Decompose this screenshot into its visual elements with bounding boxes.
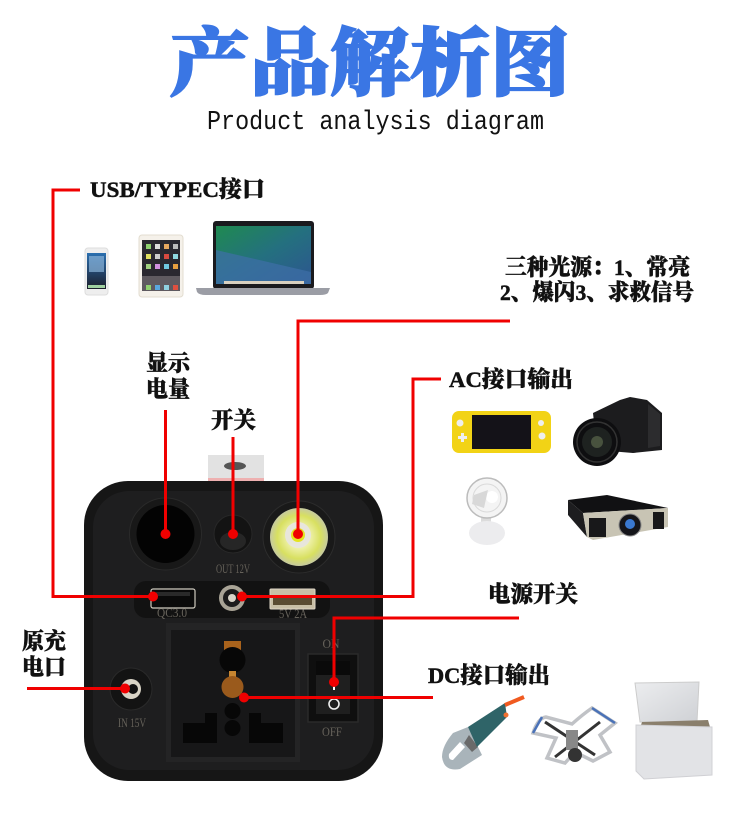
callout line: display <box>162 410 169 538</box>
USB 5V 2A port: 5V 2A <box>279 606 307 621</box>
label: AC output: AC接口输出 <box>449 366 573 392</box>
port strip <box>134 581 330 621</box>
label: OFF: OFF <box>322 724 342 739</box>
label: three light modes <box>500 254 694 305</box>
label: three light modes: 三种光源：1、常亮 <box>505 254 690 280</box>
label: ON: ON <box>322 636 340 651</box>
icon: phone <box>85 248 108 295</box>
switch button <box>214 515 252 553</box>
label: switch: 开关 <box>211 408 256 433</box>
USB QC3.0 port <box>151 589 195 620</box>
bracket <box>208 455 264 482</box>
icon: desk fan <box>467 478 507 545</box>
label: charge port: 电口 <box>22 655 66 680</box>
icon: projector <box>568 495 668 540</box>
label: display charge: 电量 <box>146 377 190 402</box>
USB 5V 2A port <box>270 589 315 621</box>
callout line: USB <box>53 190 156 600</box>
label: DC output: DC接口输出 <box>428 662 550 688</box>
icon: camera <box>573 397 662 466</box>
DC jack <box>219 585 245 611</box>
label: charge port <box>22 628 66 680</box>
label: display charge: 显示 <box>146 351 192 376</box>
callout line: AC <box>238 379 441 600</box>
icon: laptop <box>196 221 330 295</box>
icon: freezer <box>635 682 712 779</box>
device <box>84 455 383 781</box>
icon: vacuum <box>442 697 524 770</box>
device body <box>84 481 383 781</box>
AC socket <box>166 623 300 762</box>
callout line: power switch <box>330 618 519 686</box>
display hole <box>130 498 202 570</box>
rocker switch <box>308 654 358 722</box>
USB QC3.0 port: QC3.0 <box>157 605 187 620</box>
label: power switch: 电源开关 <box>488 582 578 607</box>
callout line: DC <box>240 694 433 701</box>
icon: game console <box>452 411 551 453</box>
label: charge port: 原充 <box>22 628 66 654</box>
subtitle: Product analysis diagram <box>207 108 544 138</box>
charging jack <box>110 668 152 710</box>
LED light <box>263 501 335 573</box>
label: USB/TYPEC: USB/TYPEC接口 <box>90 177 265 202</box>
icon: drone <box>533 708 615 763</box>
callout line: light <box>294 321 510 538</box>
label: three light modes: 2、爆闪3、求救信号 <box>500 280 694 305</box>
icon: tablet <box>139 235 183 297</box>
label: display charge <box>146 351 192 402</box>
label: OUT 12V: OUT 12V <box>216 561 250 576</box>
callout line: charge <box>27 685 128 692</box>
title: 产品解析图 <box>170 5 570 111</box>
callout line: switch <box>230 437 236 538</box>
label: IN 15V: IN 15V <box>118 715 146 730</box>
